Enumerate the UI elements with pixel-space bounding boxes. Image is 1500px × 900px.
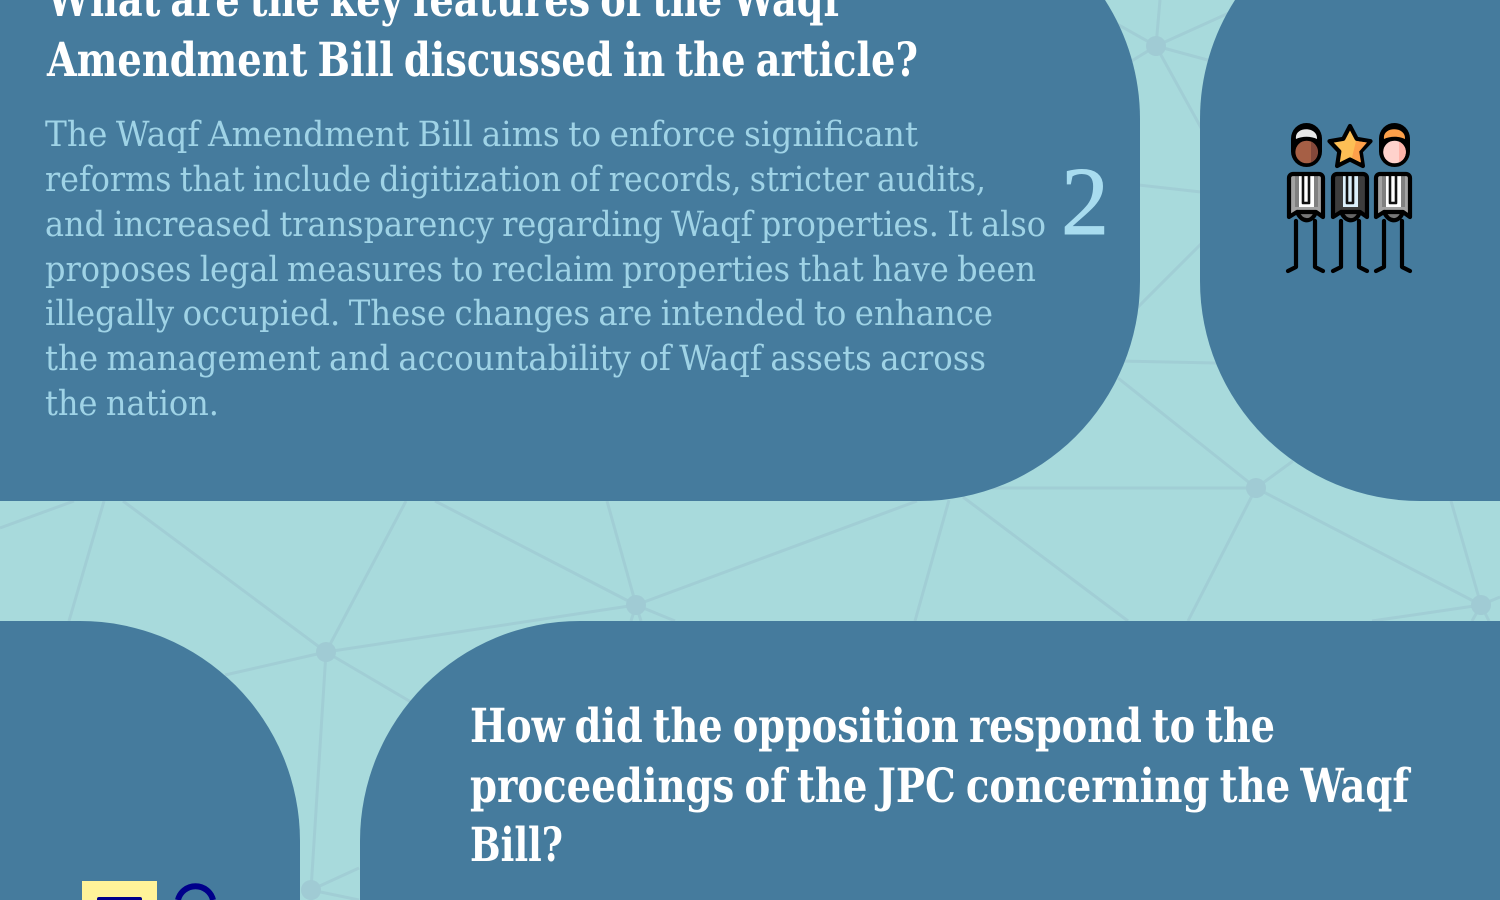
icon: document and magnifier, cropped (82, 881, 213, 900)
heading: opposition response: How did the opposition respond to the (470, 699, 1275, 754)
icon: three people with star (1288, 123, 1410, 271)
body text: key features answer: the management and accountability of Waqf assets across (45, 339, 986, 379)
heading: key features (46, 0, 918, 88)
icon: right person (1376, 123, 1410, 271)
body text: key features answer: The Waqf Amendment Bill aims to enforce significant (45, 115, 918, 155)
body text: key features answer: the nation. (45, 384, 219, 424)
heading: opposition response (470, 699, 1411, 873)
panel: icon panel top right (1200, 0, 1500, 501)
panel: opposition question (360, 621, 1500, 900)
body text: key features answer: illegally occupied. These changes are intended to enhance (45, 294, 993, 334)
panel: icon panel bottom left (0, 621, 300, 900)
body text: key features answer (45, 115, 1046, 424)
body text: key features answer: and increased transparency regarding Waqf properties. It also (45, 205, 1046, 245)
icon: middle person body (1333, 174, 1367, 271)
body text: key features answer: proposes legal measures to reclaim properties that have been (45, 250, 1036, 290)
panel: key features question (0, 0, 1140, 501)
icon: left person (1288, 123, 1323, 271)
step number 2: 2 (1061, 148, 1109, 256)
heading: opposition response: Bill? (470, 818, 563, 873)
icon: star (1329, 126, 1370, 166)
body text: key features answer: reforms that include digitization of records, stricter audits, (45, 160, 986, 200)
heading: key features: Amendment Bill discussed in the article? (46, 33, 918, 88)
